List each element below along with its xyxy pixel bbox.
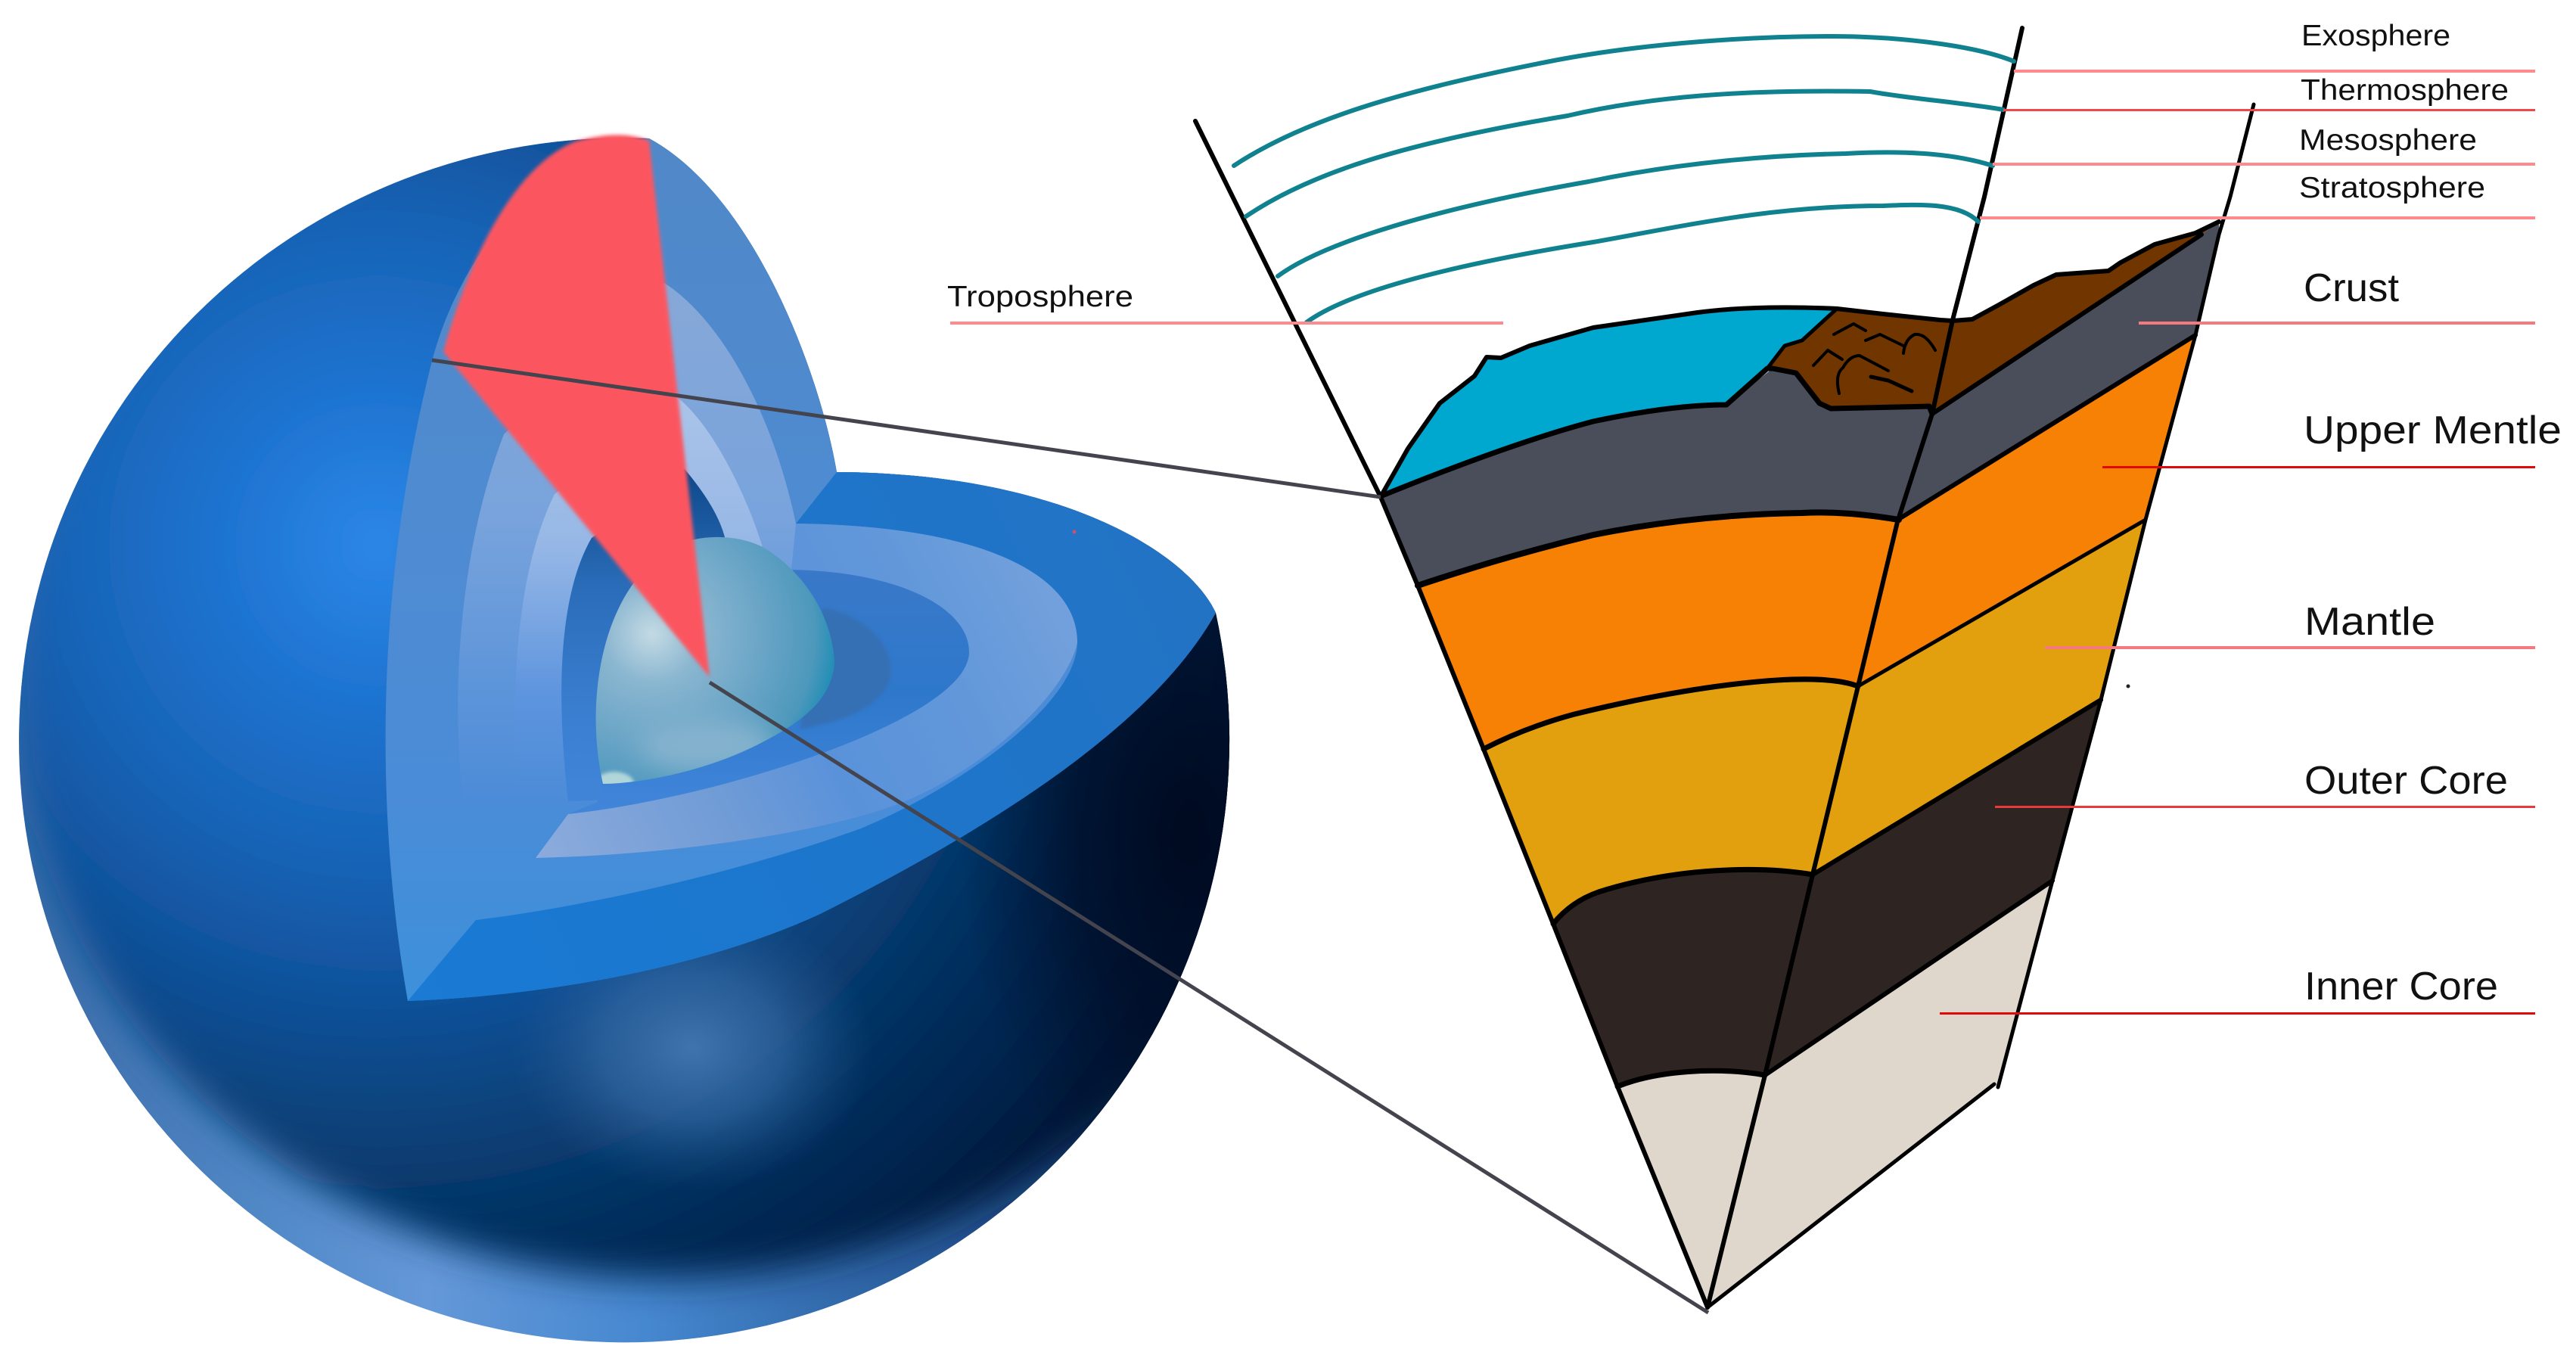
label: Mantle [2045, 600, 2535, 649]
label: Inner Core: Inner Core [2304, 965, 2498, 1009]
layer boundary outlines [1382, 222, 2219, 1307]
label: Upper Mentle: Upper Mentle [2304, 409, 2562, 452]
label: Thermosphere: Thermosphere [2301, 74, 2509, 107]
layer: land brown side [1932, 222, 2219, 414]
layer: upper mantle front [1418, 512, 1899, 749]
wall dark ring [561, 469, 757, 801]
connector lines from sphere to wedge [432, 360, 1708, 1313]
floor darker ring [800, 608, 891, 729]
wedge middle edge [1707, 28, 2022, 1307]
floor inner area [568, 570, 969, 814]
atmosphere boundary arcs [1234, 36, 2014, 322]
speck on floor [1073, 530, 1076, 534]
red wedge [443, 135, 710, 677]
label: Outer Core [1995, 759, 2535, 808]
label: Stratosphere: Stratosphere [2299, 172, 2485, 204]
layer: land brown front [1767, 309, 1953, 414]
label: Inner Core [1940, 965, 2535, 1015]
layer: inner core side [1707, 881, 2052, 1307]
label: Mesosphere [1993, 124, 2535, 166]
wall band 3 [514, 397, 787, 802]
layer: mantle front [1484, 679, 1858, 924]
layer: outer core front [1553, 869, 1813, 1086]
label: Troposphere [947, 281, 1503, 325]
label: Exosphere [2014, 20, 2535, 73]
label: Crust: Crust [2304, 266, 2400, 310]
layer: ocean [1382, 307, 1837, 494]
layer: crust side [1899, 222, 2219, 519]
layer: crust front [1382, 368, 1932, 583]
label: Troposphere: Troposphere [947, 281, 1133, 313]
layer: inner core front [1617, 1071, 1765, 1307]
label: Upper Mentle [2102, 409, 2562, 468]
label: Exosphere: Exosphere [2301, 20, 2450, 52]
floor outer band [408, 472, 1216, 1001]
layer: mantle side [1813, 520, 2146, 875]
wedge left edge [1195, 121, 1707, 1307]
panel: layered Earth and atmosphere wedge [1195, 28, 2254, 1307]
layer: outer core side [1765, 700, 2101, 1075]
sphere outer surface [19, 138, 1230, 1342]
label: Outer Core: Outer Core [2304, 759, 2508, 803]
inner core [596, 537, 834, 784]
layer: upper mantle side [1858, 335, 2195, 686]
wall band 2 [458, 283, 802, 802]
label: Thermosphere [2003, 74, 2535, 111]
floor light strip [536, 524, 1077, 858]
panel: cutaway Earth sphere [19, 132, 1230, 1342]
label: Mesosphere: Mesosphere [2299, 124, 2477, 157]
wedge right edge [1998, 104, 2254, 1087]
label: Stratosphere [1980, 172, 2535, 219]
cut wall outer band [386, 138, 1216, 1001]
label: Mantle: Mantle [2304, 600, 2435, 644]
label: Crust [2139, 266, 2535, 325]
tiny speck [2126, 684, 2130, 688]
terrain marks [1813, 324, 1935, 393]
